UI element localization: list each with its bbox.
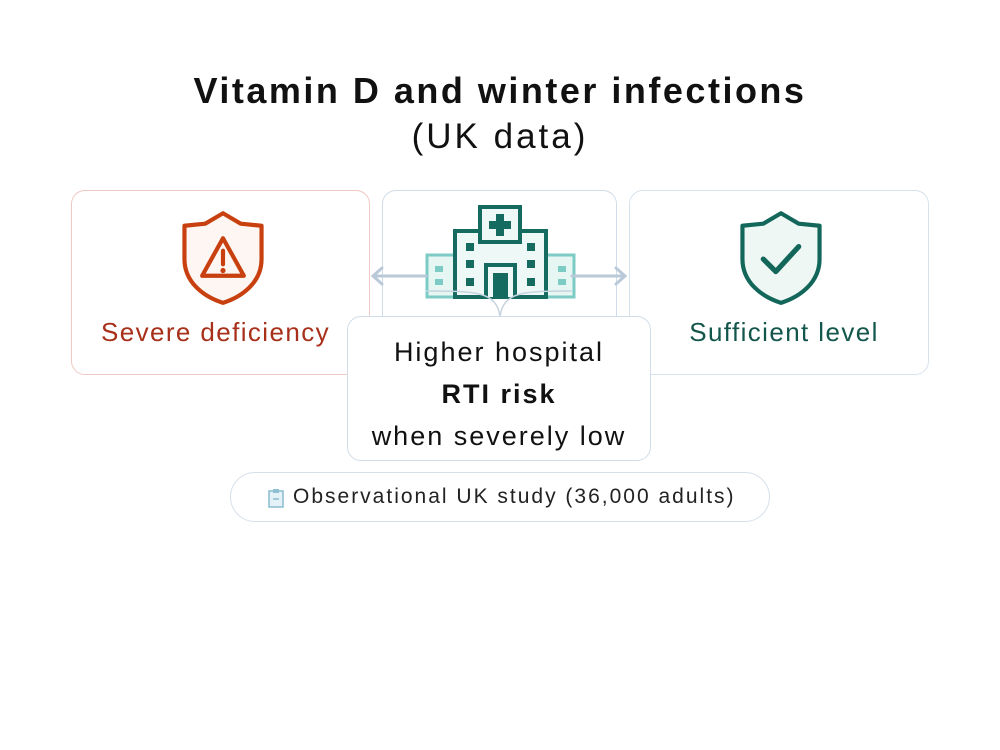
icon: check shield (740, 211, 822, 305)
callout: higher hospital RTI risk: when severely low (372, 421, 626, 451)
callout: higher hospital RTI risk: Higher hospital (394, 337, 604, 367)
panel: hospital (382, 190, 617, 390)
footnote pill (230, 472, 770, 522)
label: sufficient level: Sufficient level (689, 317, 879, 347)
arrows: left and right (371, 266, 627, 316)
title: Vitamin D and winter infections (194, 70, 806, 111)
icon: hospital (426, 205, 576, 299)
icon: clipboard (268, 489, 284, 508)
panel: severe deficiency (71, 190, 370, 375)
icon: warning shield (182, 211, 264, 305)
footnote pill: Observational UK study (36,000 adults) (293, 485, 736, 508)
panel: sufficient level (629, 190, 929, 375)
callout: higher hospital RTI risk (347, 316, 651, 461)
label: severe deficiency: Severe deficiency (101, 317, 330, 347)
title (194, 70, 806, 156)
callout: higher hospital RTI risk: RTI risk (441, 379, 557, 409)
title: (UK data) (412, 117, 588, 156)
